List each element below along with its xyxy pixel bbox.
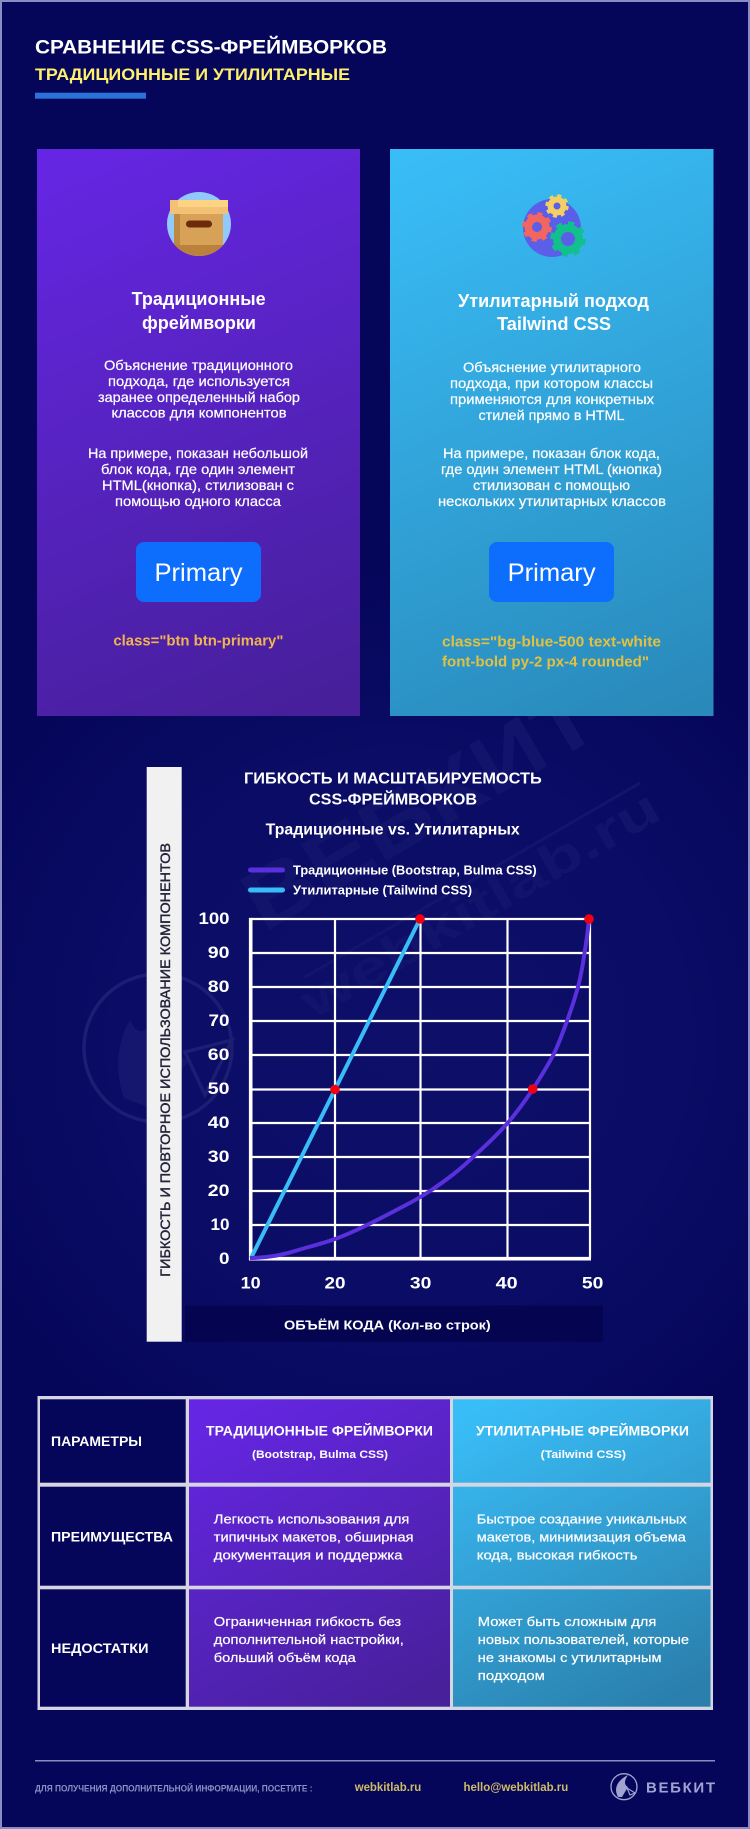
y axis values: 0 [219,1250,230,1268]
title: СРАВНЕНИЕ CSS-ФРЕЙМВОРКОВ [35,36,387,58]
title accent bar [35,93,146,99]
explanation text: Объяснение утилитарного [463,359,641,375]
x axis values: 30 [410,1274,431,1292]
disadvantages: utility: не знакомы с утилитарным [478,1650,662,1665]
code classes [442,634,661,670]
disadvantages: utility: Может быть сложным для [478,1614,656,1629]
code classes: class="bg-blue-500 text-white [442,634,661,650]
footer [35,1760,715,1800]
x axis values: 10 [241,1274,261,1292]
icon: gears [523,196,584,257]
disadvantages: traditional: дополнительной настройки, [214,1632,404,1647]
logo [611,1774,715,1800]
column header: utility: (Tailwind CSS) [541,1449,626,1461]
legend: Утилитарные (Tailwind CSS) [293,883,472,897]
icon: cardboard box [167,192,231,260]
chart heading: ГИБКОСТЬ И МАСШТАБИРУЕМОСТЬ [244,770,542,787]
panel: traditional frameworks [37,149,360,716]
email link: hello@webkitlab.ru [464,1782,568,1794]
primary button: Primary [508,559,596,587]
advantages: utility [477,1511,687,1562]
explanation text: подхода, при котором классы [450,375,653,391]
legend [250,863,537,897]
explanation text [450,359,654,423]
column header: utility: УТИЛИТАРНЫЕ ФРЕЙМВОРКИ [476,1423,689,1438]
card heading [458,291,650,334]
y axis values: 50 [208,1080,230,1098]
column header: traditional [206,1423,433,1461]
disadvantages: utility: новых пользователей, которые [478,1632,689,1647]
y axis values: 70 [208,1012,230,1030]
row labels: НЕДОСТАТКИ [51,1641,148,1656]
watermark: webkitlab.ru [289,779,669,1030]
panel: utility approach [390,149,714,716]
primary button: Primary [154,559,243,587]
chart panel [147,767,603,1342]
purple column cells [189,1399,450,1707]
disadvantages: utility [478,1614,689,1683]
example text: стилизован с помощью [473,477,630,493]
row labels [51,1434,173,1656]
website link: webkitlab.ru [354,1782,421,1794]
logo: ВЕБКИТ [646,1780,715,1797]
y axis values: 60 [208,1046,230,1064]
advantages: utility: Быстрое создание уникальных [477,1511,687,1526]
example text [438,445,666,509]
x axis values: 40 [496,1274,518,1292]
comparison table [38,1396,713,1710]
primary button [489,542,614,602]
advantages: traditional: типичных макетов, обширная [214,1529,414,1544]
card heading: фреймворки [142,313,256,333]
x axis values [241,1274,603,1292]
explanation text [98,357,300,420]
example text: нескольких утилитарных классов [438,493,666,509]
column header: traditional: (Bootstrap, Bulma CSS) [252,1449,388,1461]
y axis values: 20 [208,1182,230,1200]
advantages: traditional [214,1511,414,1562]
code classes: font-bold py-2 px-4 rounded" [442,654,649,670]
legend: Традиционные (Bootstrap, Bulma CSS) [293,863,537,877]
column header: utility [476,1423,689,1461]
y axis values: 80 [208,978,230,996]
x axis values: 50 [582,1274,603,1292]
disadvantages: traditional: Ограниченная гибкость без [214,1614,401,1629]
example text: помощью одного класса [115,493,281,509]
y axis values: 10 [210,1216,230,1234]
example text [88,445,308,509]
line: utility [251,919,420,1258]
explanation text: применяются для конкретных [450,391,654,407]
explanation text: заранее определенный набор [98,389,300,405]
x axis values: 20 [324,1274,346,1292]
watermark: ВЕБКИТ [225,667,613,949]
y axis values [198,910,230,1268]
column header: traditional: ТРАДИЦИОННЫЕ ФРЕЙМВОРКИ [206,1423,433,1438]
row labels: ПРЕИМУЩЕСТВА [51,1529,173,1544]
primary button [136,542,261,602]
advantages: traditional: Легкость использования для [214,1511,409,1526]
footer note: ДЛЯ ПОЛУЧЕНИЯ ДОПОЛНИТЕЛЬНОЙ ИНФОРМАЦИИ, ПОСЕТИТЕ : [35,1782,312,1794]
example text: На примере, показан блок кода, [443,445,660,461]
y axis values: 40 [208,1114,230,1132]
code class: class="btn btn-primary" [113,634,283,650]
row labels: ПАРАМЕТРЫ [51,1434,142,1449]
advantages: utility: кода, высокая гибкость [477,1547,638,1562]
y axis label [147,767,182,1342]
chart heading [244,770,542,808]
explanation text: классов для компонентов [112,404,286,420]
example text: где один элемент HTML (кнопка) [441,461,662,477]
data points [330,914,594,1094]
plot grid [249,918,591,1260]
example text: На примере, показан небольшой [88,445,308,461]
card heading: Tailwind CSS [497,314,611,334]
explanation text: подхода, где используется [108,373,290,389]
example text: блок кода, где один элемент [101,461,296,477]
example text: HTML(кнопка), стилизован с [102,477,294,493]
y axis label: ГИБКОСТЬ И ПОВТОРНОЕ ИСПОЛЬЗОВАНИЕ КОМПОНЕНТОВ [157,843,173,1277]
explanation text: стилей прямо в HTML [478,407,625,423]
subtitle: ТРАДИЦИОННЫЕ И УТИЛИТАРНЫЕ [35,65,350,84]
blue column cells [453,1399,710,1707]
watermark [84,667,669,1122]
chart heading: CSS-ФРЕЙМВОРКОВ [309,789,477,808]
advantages: utility: макетов, минимизация объема [477,1529,687,1544]
y axis values: 30 [208,1148,230,1166]
card heading: Традиционные [132,289,266,309]
advantages: traditional: документация и поддержка [214,1547,403,1562]
disadvantages: utility: подходом [478,1668,545,1683]
x axis label: ОБЪЁМ КОДА (Кол-во строк) [284,1317,491,1332]
disadvantages: traditional: больший объём кода [214,1650,357,1665]
chart subtitle: Традиционные vs. Утилитарных [266,822,520,839]
explanation text: Объяснение традиционного [104,357,293,373]
disadvantages: traditional [214,1614,404,1665]
y axis values: 100 [198,910,230,928]
x axis label [185,1306,603,1342]
card heading [132,289,266,333]
line: traditional [250,919,589,1258]
card heading: Утилитарный подход [458,291,650,311]
y axis values: 90 [208,944,230,962]
